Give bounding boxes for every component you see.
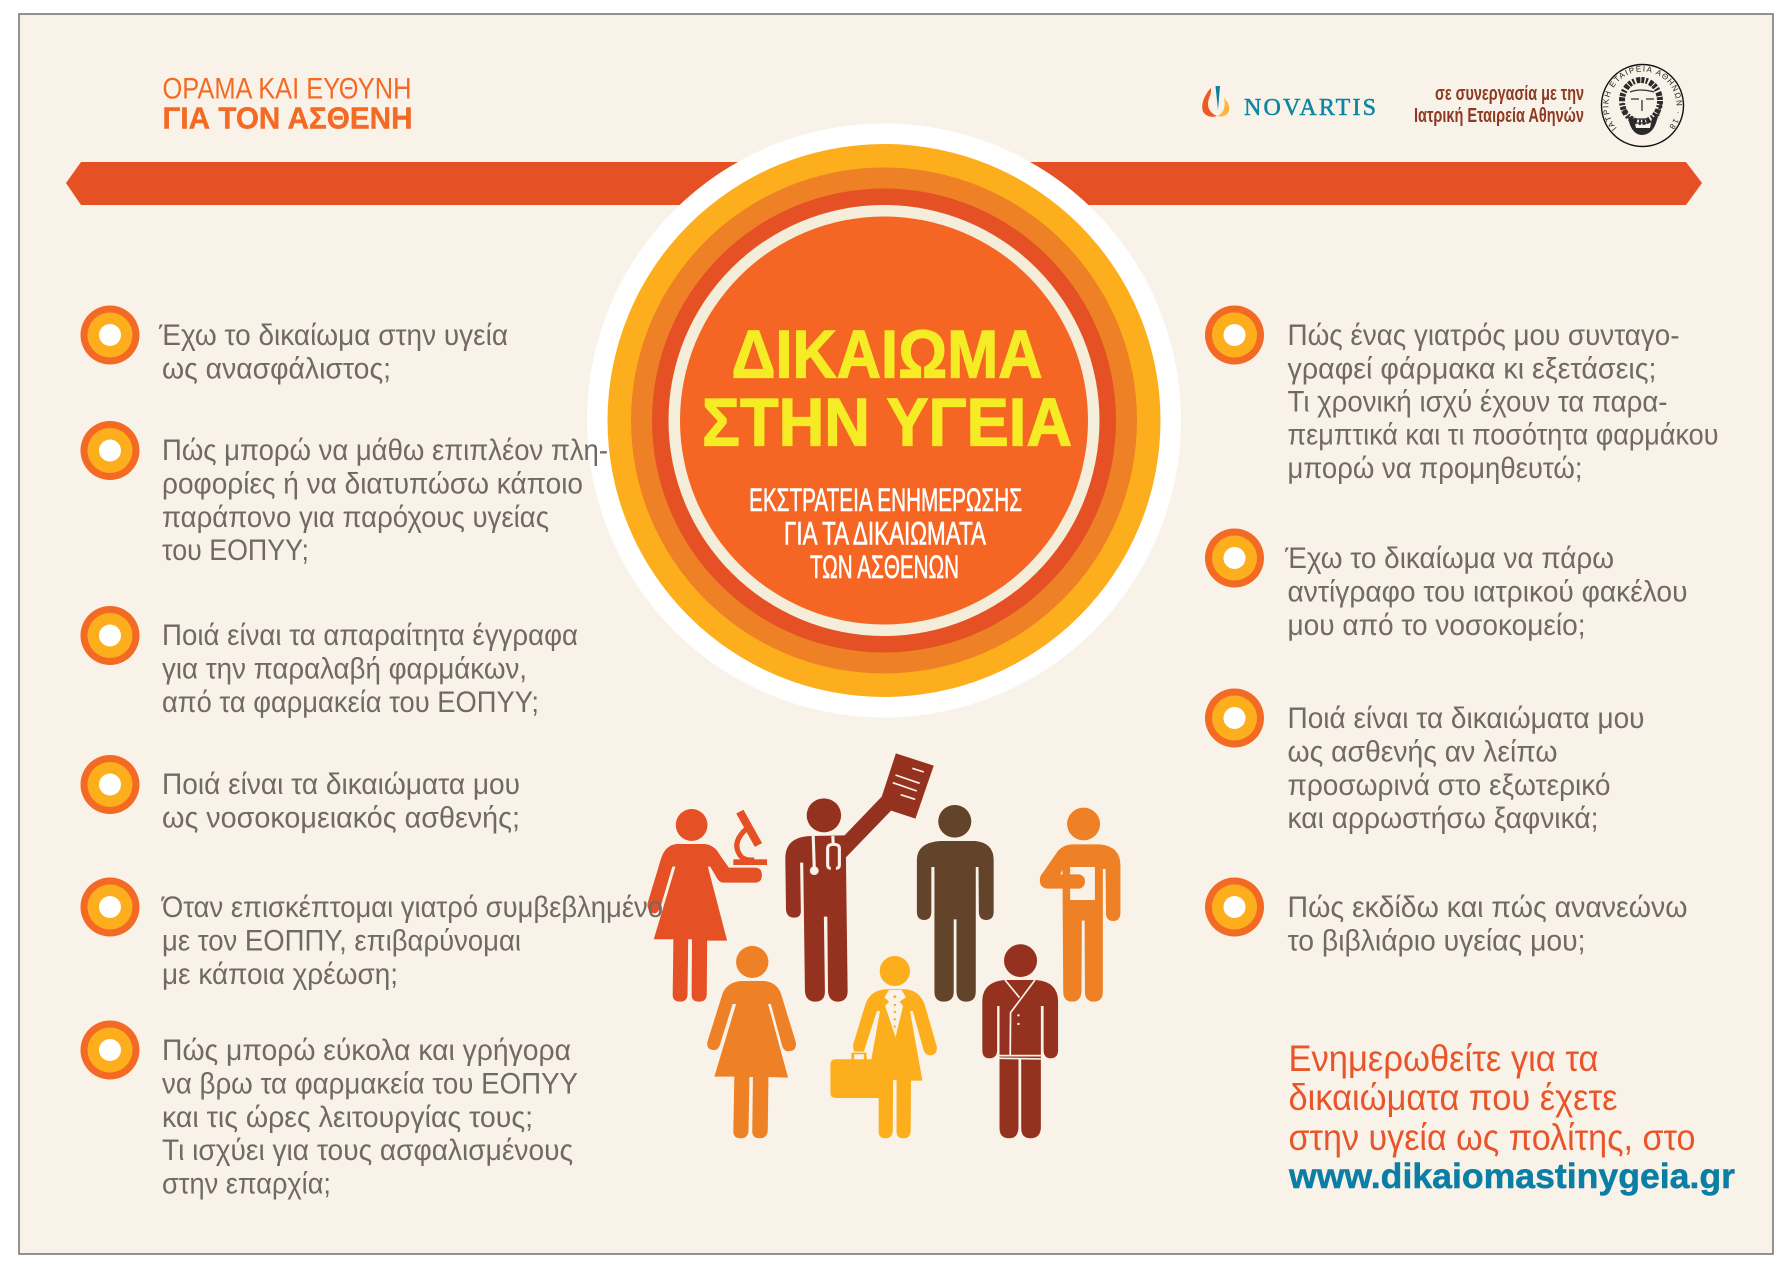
left question 6: και τις ώρες λειτουργίας τους; <box>162 1101 533 1134</box>
campaign title: ΔΙΚΑΙΩΜΑ <box>732 316 1042 392</box>
bullet icon <box>80 878 140 936</box>
right question 1: Τι χρονική ισχύ έχουν τα παρα- <box>1288 385 1668 418</box>
bullet icon <box>80 606 140 665</box>
logo: Novartis <box>1202 86 1376 121</box>
bullet icon <box>80 421 140 480</box>
figure: man in suit <box>982 944 1058 1138</box>
right question 3 <box>1205 688 1644 835</box>
left question 2: ροφορίες ή να διατυπώσω κάποιο <box>162 467 583 500</box>
campaign title: ΣΤΗΝ ΥΓΕΙΑ <box>702 384 1072 460</box>
orange banner arrow <box>66 162 1702 205</box>
bullet icon <box>1205 528 1264 588</box>
figure: doctor with document <box>785 753 934 1002</box>
figure: woman with microscope <box>647 809 767 1002</box>
bullet icon <box>80 306 140 364</box>
right question 4: το βιβλιάριο υγείας μου; <box>1288 924 1586 957</box>
logo: Novartis: NOVARTIS <box>1244 95 1376 121</box>
bullet icon <box>1205 878 1264 936</box>
left question 2: παράπονο για παρόχους υγείας <box>162 501 549 534</box>
left question 6: Πώς μπορώ εύκολα και γρήγορα <box>162 1034 571 1067</box>
left question 1: ως ανασφάλιστος; <box>162 352 391 385</box>
call to action: στην υγεία ως πολίτης, στο <box>1288 1117 1696 1158</box>
right question 4 <box>1205 878 1688 957</box>
left question 2: του ΕΟΠΥΥ; <box>162 534 309 567</box>
bullet icon <box>1205 688 1264 748</box>
left question 2 <box>80 421 608 567</box>
call to action: Ενημερωθείτε για τα <box>1288 1038 1598 1079</box>
header title <box>162 72 412 136</box>
left question 3 <box>80 606 578 719</box>
left question 1 <box>80 306 508 385</box>
campaign subtitle: ΕΚΣΤΡΑΤΕΙΑ ΕΝΗΜΕΡΩΣΗΣ <box>749 482 1022 518</box>
central concentric circle badge <box>587 124 1181 718</box>
left question 4: ως νοσοκομειακός ασθενής; <box>162 801 520 834</box>
bullet icon <box>80 755 140 814</box>
left question 6: Τι ισχύει για τους ασφαλισμένους <box>162 1134 573 1167</box>
left question 6: στην επαρχία; <box>162 1168 331 1201</box>
left question 3: για την παραλαβή φαρμάκων, <box>162 652 527 685</box>
right question 3: προσωρινά στο εξωτερικό <box>1288 769 1610 802</box>
right question 2 <box>1205 528 1688 642</box>
campaign title <box>702 316 1072 460</box>
right question 3: ως ασθενής αν λείπω <box>1288 735 1558 768</box>
left question 5 <box>80 878 663 991</box>
left question 5: με τον ΕΟΠΠΥ, επιβαρύνομαι <box>162 924 521 957</box>
bullet icon <box>1205 306 1264 364</box>
header title: ΟΡΑΜΑ ΚΑΙ ΕΥΘΥΝΗ <box>162 72 412 106</box>
bullet icon <box>80 1020 140 1080</box>
right question 1: γραφεί φάρμακα κι εξετάσεις; <box>1288 352 1656 385</box>
right question 1 <box>1205 306 1718 485</box>
header title: ΓΙΑ ΤΟΝ ΑΣΘΕΝΗ <box>162 100 412 136</box>
call to action <box>1288 1038 1735 1196</box>
people illustration <box>647 753 1120 1138</box>
figure: man in brown <box>917 805 994 1002</box>
website link: www.dikaiomastinygeia.gr <box>1288 1157 1735 1196</box>
figure: businesswoman with briefcase <box>830 956 937 1138</box>
figure: woman in orange dress <box>707 946 796 1138</box>
right question 2: αντίγραφο του ιατρικού φακέλου <box>1288 575 1688 608</box>
figure: man with clipboard <box>1040 808 1120 1002</box>
left question 6 <box>80 1020 578 1201</box>
left question 2: Πώς μπορώ να μάθω επιπλέον πλη- <box>162 434 608 467</box>
right question 1: Πώς ένας γιατρός μου συνταγο- <box>1288 319 1680 352</box>
right question 1: μπορώ να προμηθευτώ; <box>1288 452 1582 485</box>
left question 6: να βρω τα φαρμακεία του ΕΟΠΥΥ <box>162 1067 578 1100</box>
left question 3: από τα φαρμακεία του ΕΟΠΥΥ; <box>162 686 539 719</box>
call to action: δικαιώματα που έχετε <box>1288 1077 1618 1118</box>
logo: Athens Medical Society seal <box>1600 64 1684 148</box>
left question 5: με κάποια χρέωση; <box>162 958 398 991</box>
campaign subtitle: ΤΩΝ ΑΣΘΕΝΩΝ <box>810 549 959 585</box>
campaign subtitle <box>749 482 1022 585</box>
partner text: σε συνεργασία με την <box>1435 83 1584 105</box>
right question 4: Πώς εκδίδω και πώς ανανεώνω <box>1288 891 1688 924</box>
left question 3: Ποιά είναι τα απαραίτητα έγγραφα <box>162 619 578 652</box>
left question 4 <box>80 755 520 834</box>
partner text <box>1414 83 1584 127</box>
left question 4: Ποιά είναι τα δικαιώματα μου <box>162 768 520 801</box>
right question 1: πεμπτικά και τι ποσότητα φαρμάκου <box>1288 419 1718 452</box>
right question 3: Ποιά είναι τα δικαιώματα μου <box>1288 702 1644 735</box>
left question 1: Έχω το δικαίωμα στην υγεία <box>158 319 508 352</box>
right question 3: και αρρωστήσω ξαφνικά; <box>1288 802 1598 835</box>
left question 5: Όταν επισκέπτομαι γιατρό συμβεβλημένο <box>160 891 663 924</box>
right question 2: Έχω το δικαίωμα να πάρω <box>1284 542 1614 575</box>
partner text: Ιατρική Εταιρεία Αθηνών <box>1414 105 1584 127</box>
right question 2: μου από το νοσοκομείο; <box>1288 609 1586 642</box>
campaign subtitle: ΓΙΑ ΤΑ ΔΙΚΑΙΩΜΑΤΑ <box>784 516 986 552</box>
